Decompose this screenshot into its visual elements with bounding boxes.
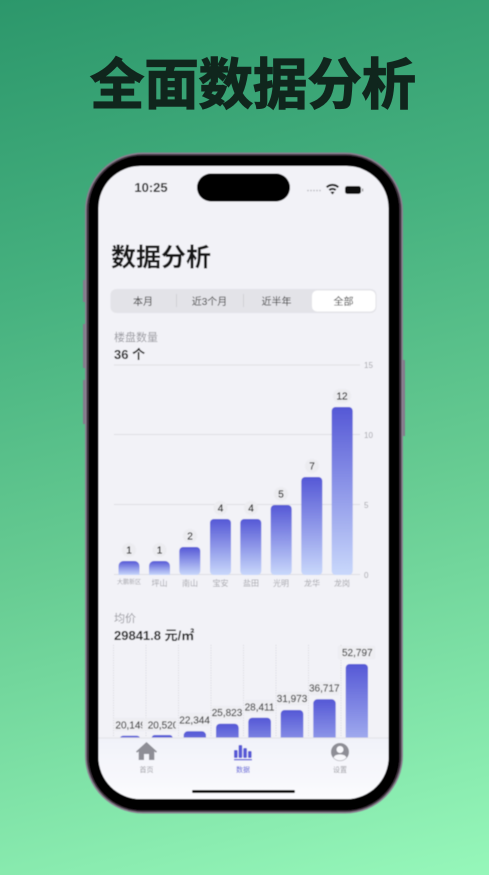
status bar time: 10:25: [134, 180, 168, 195]
chart 2 values: 22,344: [179, 715, 210, 726]
segmented control: 本月: [133, 295, 153, 308]
tab: data: 数据: [236, 765, 250, 774]
chart 2 value badges: [114, 646, 375, 731]
chart 1 values: 2: [187, 532, 193, 542]
page heading: 数据分析: [111, 244, 211, 272]
chart 1 district labels: 坪山: [152, 578, 168, 588]
chart 2 values: 36,717: [309, 684, 340, 695]
chart 2 bars: [120, 664, 368, 738]
tab bar: [98, 738, 389, 799]
chart 1 heading: 36 个: [114, 347, 145, 362]
chart 1 bars: [118, 407, 353, 575]
chart 2 heading: [114, 612, 194, 643]
phone screen: [98, 166, 389, 799]
chart 1 values: 5: [278, 490, 284, 500]
chart 1 district labels: 大鹏新区: [117, 578, 141, 586]
chart 1: property count: [114, 330, 373, 588]
chart 2 values: 25,823: [212, 708, 243, 719]
chart 2 values: [115, 648, 373, 731]
chart 1 heading: [114, 330, 158, 362]
chart 1 district labels: [117, 578, 350, 588]
phone frame inner band: [86, 154, 402, 812]
chart 1 values: [126, 392, 348, 556]
chart 1 district labels: 光明: [273, 578, 289, 588]
dynamic island: [197, 174, 290, 202]
chart 2: average price: [113, 612, 373, 738]
chart 2 values: 20,149: [115, 720, 146, 731]
chart 1 axis labels: 5: [364, 501, 369, 510]
tab: settings: 设置: [333, 765, 347, 774]
chart 1 axis labels: 15: [364, 361, 373, 370]
home indicator: [192, 790, 295, 793]
chart 1 district labels: 盐田: [243, 578, 259, 588]
tab: home: 首页: [140, 765, 154, 774]
phone mockup: [83, 152, 405, 814]
tab: settings: [331, 743, 349, 774]
chart 1 values: 4: [248, 504, 254, 514]
chart 1 axis labels: 10: [364, 431, 373, 440]
tab: data: [234, 745, 252, 774]
segmented control: [110, 289, 376, 313]
chart 2 values: 20,520: [148, 720, 179, 731]
chart 1 values: 1: [157, 546, 163, 556]
segmented control: 全部: [334, 295, 354, 308]
chart 2 values: 28,411: [245, 702, 275, 713]
chart 2 heading: 均价: [114, 612, 136, 625]
phone bezel: [88, 156, 400, 810]
tab: home: [136, 742, 157, 774]
chart 1 district labels: 龙华: [304, 578, 320, 588]
chart 2 heading: 29841.8 元/㎡: [114, 628, 194, 643]
chart 1 values: 7: [309, 462, 315, 472]
chart 1 values: 1: [126, 546, 132, 556]
title: 全面数据分析: [90, 54, 416, 116]
chart 1 axis labels: [364, 361, 373, 580]
segmented control: 近3个月: [192, 295, 227, 308]
status bar icons: [307, 184, 363, 194]
chart 1 axis labels: 0: [364, 571, 369, 580]
chart 2 values: 31,973: [277, 694, 308, 705]
chart 2 values: 52,797: [342, 648, 373, 659]
chart 1 value badges: [122, 389, 351, 557]
chart 1 values: 12: [336, 392, 348, 402]
phone frame: [85, 152, 403, 814]
chart 1 heading: 楼盘数量: [114, 330, 158, 344]
chart 1 district labels: 龙岗: [334, 578, 350, 588]
chart 1 district labels: 南山: [182, 578, 198, 588]
chart 1 values: 4: [218, 504, 224, 514]
chart 1 district labels: 宝安: [212, 578, 228, 588]
segmented control: 近半年: [262, 295, 292, 308]
phone side buttons: [83, 280, 405, 436]
